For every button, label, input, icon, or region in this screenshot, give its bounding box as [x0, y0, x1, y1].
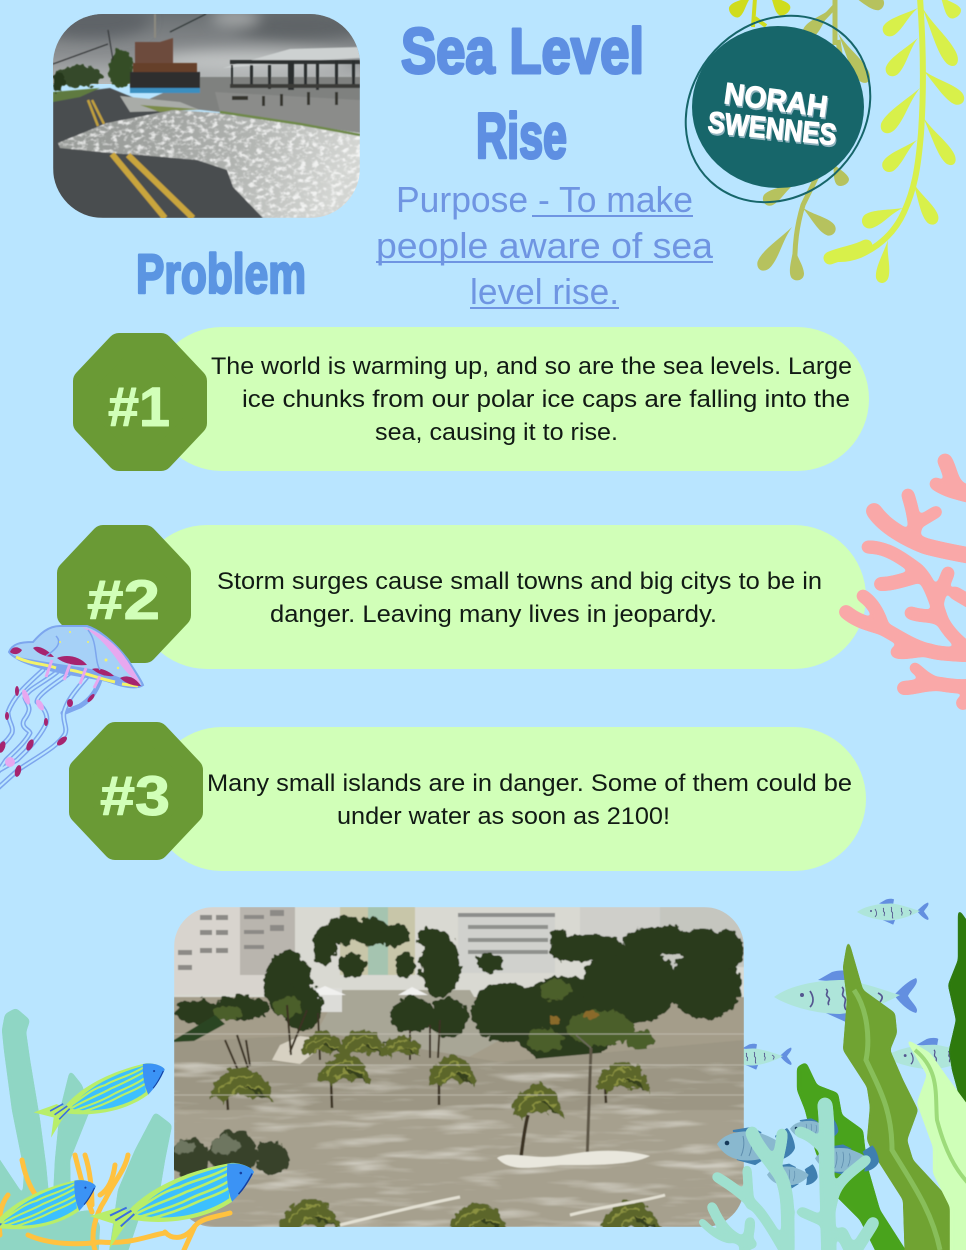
- mint coral: [702, 1105, 873, 1250]
- fish: pale shoal: [774, 899, 966, 1074]
- orange coral: [0, 1155, 230, 1250]
- photo: storm surge on coastal road: [53, 14, 360, 218]
- problem 1 card: The world is warming up, and so are the sea levels. Large: [211, 353, 852, 380]
- seaweed top right: [726, 0, 966, 284]
- problem 3 card: #3: [100, 764, 170, 827]
- photo: flooded palm-lined street: [170, 907, 744, 1237]
- problem 2 card: [69, 525, 866, 669]
- problem 3 card: [81, 727, 866, 871]
- title: [401, 15, 644, 172]
- title: Sea Level: [401, 15, 644, 87]
- problem 3 card: under water as soon as 2100!: [337, 803, 670, 830]
- purpose statement: level rise.: [470, 271, 619, 312]
- purpose statement: [376, 179, 714, 312]
- problem 1 card: [85, 327, 869, 471]
- kelp bottom right: [797, 908, 966, 1250]
- title: Rise: [476, 100, 567, 172]
- icon: jellyfish: [0, 626, 143, 788]
- author badge: SWENNES: [706, 106, 838, 152]
- problem 2 card: #2: [87, 568, 160, 631]
- problem 2 card: Storm surges cause small towns and big citys to be in: [217, 568, 822, 595]
- purpose statement: Purpose - To make: [396, 179, 693, 220]
- problem 1 card: ice chunks from our polar ice caps are falling into the: [242, 386, 850, 413]
- author badge: [648, 0, 908, 240]
- problem 1 card: #1: [108, 375, 170, 438]
- problem heading: Problem: [136, 242, 306, 305]
- fish behind photo: [720, 1044, 792, 1069]
- purpose statement: people aware of sea: [376, 225, 714, 266]
- problem 3 card: Many small islands are in danger. Some of them could be: [207, 770, 852, 797]
- problem 1 card: sea, causing it to rise.: [375, 419, 618, 446]
- author badge: NORAH: [722, 77, 830, 124]
- problem 2 card: danger. Leaving many lives in jeopardy.: [270, 601, 717, 628]
- blue fish group: [717, 1119, 879, 1188]
- striped fish group: [0, 1058, 263, 1250]
- seaweed bottom left: [0, 1008, 172, 1250]
- coral: pink: [846, 461, 966, 703]
